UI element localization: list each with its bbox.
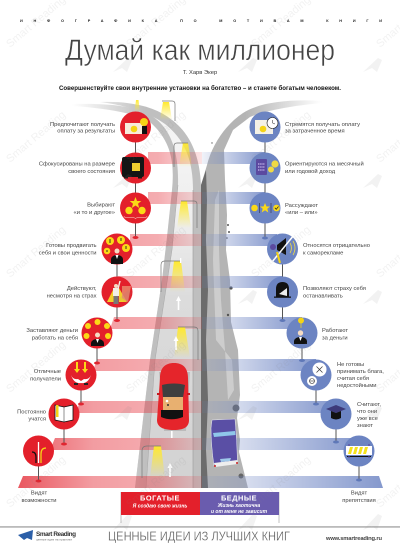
left column captions: Действуют, <box>67 285 97 292</box>
subtitle: Совершенствуйте свои внутренние установки на богатство – и станете богатым человеком. <box>59 84 341 92</box>
right column captions: Не готовы <box>337 362 364 368</box>
right column captions: знают <box>357 423 373 429</box>
left column captions: Отличные <box>34 369 61 375</box>
left column captions: работать на себя <box>32 336 78 342</box>
left column captions: себя и свои ценности <box>39 250 96 256</box>
right column captions: уже все <box>357 416 378 422</box>
legend <box>121 492 279 523</box>
left column captions: несмотря на страх <box>47 294 97 300</box>
left (rich) bands <box>18 152 202 488</box>
icon: barrier <box>344 436 374 466</box>
icon: banknote and badge <box>120 112 151 142</box>
legend: poor: и от меня не зависит <box>211 509 268 515</box>
left column captions: «и то и другое» <box>74 210 115 216</box>
left column captions: Предпочитают получать <box>50 122 115 128</box>
legend: rich: Я создаю свою жизнь <box>132 504 187 510</box>
legend: poor: БЕДНЫЕ <box>221 494 257 502</box>
icon: banknote and clock <box>250 112 280 142</box>
legend: rich: БОГАТЫЕ <box>140 494 180 502</box>
watermarks: Smart Reading <box>124 224 188 280</box>
right column captions: принимать блага, <box>337 369 384 375</box>
footer <box>0 526 400 544</box>
icon: open book <box>48 398 80 430</box>
icon: logo <box>18 530 33 540</box>
author: Т. Харв Экер <box>183 70 217 76</box>
website: www.smartreading.ru <box>325 536 382 542</box>
pin lines left <box>36 127 138 482</box>
right column captions: или годовой доход <box>285 168 336 175</box>
watermarks: Smart Reading <box>4 109 68 165</box>
right (poor) bands <box>202 152 383 488</box>
left column captions: Постоянно <box>17 409 46 415</box>
left column captions: Видят <box>31 490 47 496</box>
right column captions <box>285 122 384 504</box>
right column captions: Относятся отрицательно <box>303 243 370 249</box>
left column captions: учатся <box>28 416 46 422</box>
right column captions: Позволяют страху себя <box>303 286 366 292</box>
right column captions: «или – или» <box>285 210 318 216</box>
icon: man with coins around <box>82 318 112 348</box>
header label: ИНФОГРАФИКА ПО МОТИВАМ КНИГИ <box>20 19 382 23</box>
left column captions: оплату за результаты <box>57 129 115 135</box>
rough road of the poor <box>201 100 322 488</box>
watermarks: Smart Reading <box>249 224 313 280</box>
icon: road forks <box>23 436 54 466</box>
right column captions: Ориентируются на месячный <box>285 160 364 168</box>
legend: rich <box>121 492 200 515</box>
road arrows <box>168 258 181 477</box>
icon: hands receiving <box>66 360 96 390</box>
watermarks: Smart Reading <box>124 454 188 510</box>
left column captions: Сфокусированы на размере <box>39 162 115 168</box>
slogan: ЦЕННЫЕ ИДЕИ ИЗ ЛУЧШИХ КНИГ <box>108 530 290 544</box>
right column captions: Видят <box>351 490 367 496</box>
watermarks: Smart Reading <box>249 109 313 165</box>
right column captions: за деньги <box>322 336 348 342</box>
smooth road of the rich <box>72 102 201 488</box>
left column captions: получатели <box>30 376 61 382</box>
icon: safe <box>120 152 151 184</box>
right column captions: Стремятся получать оплату <box>285 122 360 128</box>
brand name: Smart Reading <box>36 531 76 538</box>
left column captions: Выбирают <box>87 202 115 208</box>
icon: dark tunnel <box>267 276 298 308</box>
watermarks: Smart Reading <box>249 454 313 510</box>
blue car <box>211 419 238 467</box>
watermarks: Smart Reading <box>124 339 188 395</box>
watermarks: Smart Reading <box>249 339 313 395</box>
icon: graduation cap <box>320 398 352 430</box>
left column captions: возможности <box>21 498 57 504</box>
watermarks: Smart Reading <box>124 109 188 165</box>
legend: poor: Жизнь хаотична <box>217 503 260 509</box>
right column captions: что они <box>357 409 377 415</box>
right column captions: Работают <box>322 328 348 334</box>
watermarks: Smart Reading <box>4 224 68 280</box>
icon: star and two coins <box>120 192 151 224</box>
right column captions: за затраченное время <box>285 129 345 135</box>
left column captions: Заставляют деньги <box>26 328 78 334</box>
right column captions: недостойными <box>337 382 376 389</box>
title: Думай как миллионер <box>65 34 335 67</box>
red car <box>157 363 190 431</box>
right column captions: останавливать <box>303 294 343 300</box>
watermarks: Smart Reading <box>4 339 68 395</box>
icon: man under coin <box>286 318 318 348</box>
icon: calculator and coins <box>250 152 280 184</box>
icon: circle star check <box>250 192 280 224</box>
icon: crossed out megaphone <box>267 234 298 264</box>
right column captions: считая себя <box>337 376 369 382</box>
icon: speech bubbles <box>300 360 332 390</box>
watermarks: Smart Reading <box>4 454 68 510</box>
right column captions: Рассуждают <box>285 203 318 209</box>
street lamps <box>134 100 198 478</box>
tagline: ценные идеи на практике <box>36 538 72 542</box>
right column captions: препятствия <box>342 498 376 504</box>
left column captions: своего состояния <box>68 169 115 175</box>
left column captions <box>17 122 115 504</box>
right column captions: Считают, <box>357 402 381 408</box>
icon: man with exclamation marks <box>102 234 132 264</box>
pin lines right <box>262 127 362 482</box>
icon: man with cape <box>102 276 132 308</box>
legend: poor <box>200 492 279 515</box>
left column captions: Готовы продвигать <box>46 243 96 249</box>
right column captions: к саморекламе <box>303 250 343 256</box>
